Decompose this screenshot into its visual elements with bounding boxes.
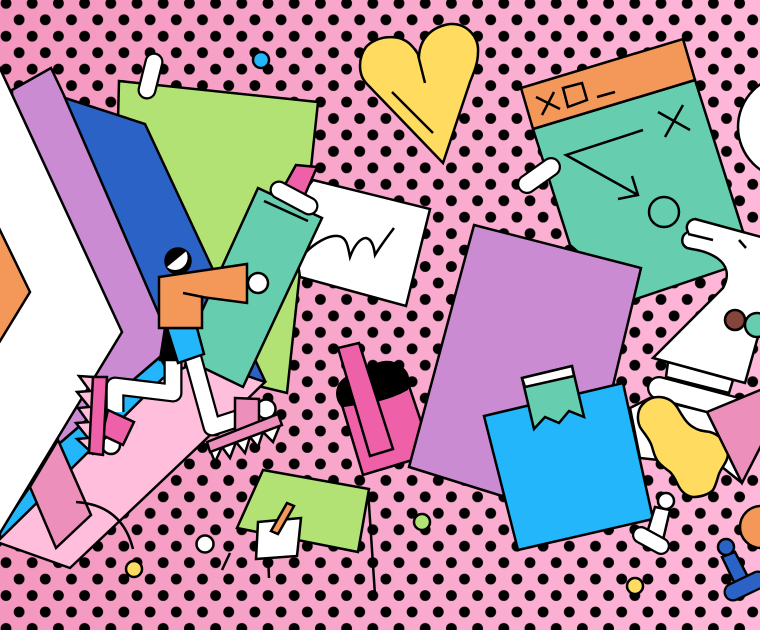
- panel: dark blue band: [65, 98, 265, 381]
- icon: yellow blob: [638, 397, 728, 497]
- icon: white pill top: [147, 62, 154, 90]
- icon: white game pawn: [641, 493, 674, 546]
- easel with green board: [222, 470, 375, 595]
- white stacked base: [630, 362, 742, 483]
- torso and arm: [159, 264, 247, 328]
- back leg: [115, 358, 173, 412]
- panel: light blue strip: [0, 357, 175, 545]
- panel: white signed note: [290, 180, 430, 306]
- panel: purple stripe: [12, 68, 180, 480]
- head: [166, 248, 190, 274]
- icon: large white circle: [738, 75, 760, 179]
- panel: blue square: [484, 383, 653, 550]
- panel: light pink sheet: [0, 360, 265, 568]
- panel: green sheet: [116, 81, 318, 393]
- icon: teal ribbon tape: [522, 366, 584, 429]
- icon: yellow heart: [360, 24, 478, 163]
- icon: yellow dot: [126, 561, 142, 577]
- panel: browser window: [521, 39, 752, 300]
- white hand and cone: [653, 219, 760, 383]
- icon: orange circle: [740, 506, 760, 548]
- character: runner figure: [115, 248, 276, 427]
- shorts: [160, 328, 204, 363]
- icon: white dot: [196, 536, 214, 552]
- icon: blue game pawn: [718, 539, 758, 592]
- window controls: [536, 83, 615, 115]
- front foot: [256, 400, 276, 418]
- game play marks: [566, 105, 690, 227]
- panel: pink diamond right: [707, 388, 760, 483]
- icon: white pill right: [527, 167, 551, 184]
- panel: large purple sheet: [409, 225, 641, 496]
- panel: teal tube: [181, 165, 322, 387]
- back foot with spiked strip: [76, 376, 134, 455]
- icon: small green dot: [414, 514, 430, 530]
- panel: pink diamond with arc: [30, 440, 133, 549]
- front leg: [193, 358, 252, 427]
- front foot ruler with teeth: [207, 398, 282, 462]
- hand: [248, 273, 268, 293]
- panel: white chevron: [0, 62, 122, 538]
- icon: small blue dot: [253, 52, 269, 68]
- panel: orange diamond: [0, 224, 30, 346]
- pink folder with black blob: [337, 343, 432, 475]
- icon: yellow dot bottom right: [627, 578, 643, 594]
